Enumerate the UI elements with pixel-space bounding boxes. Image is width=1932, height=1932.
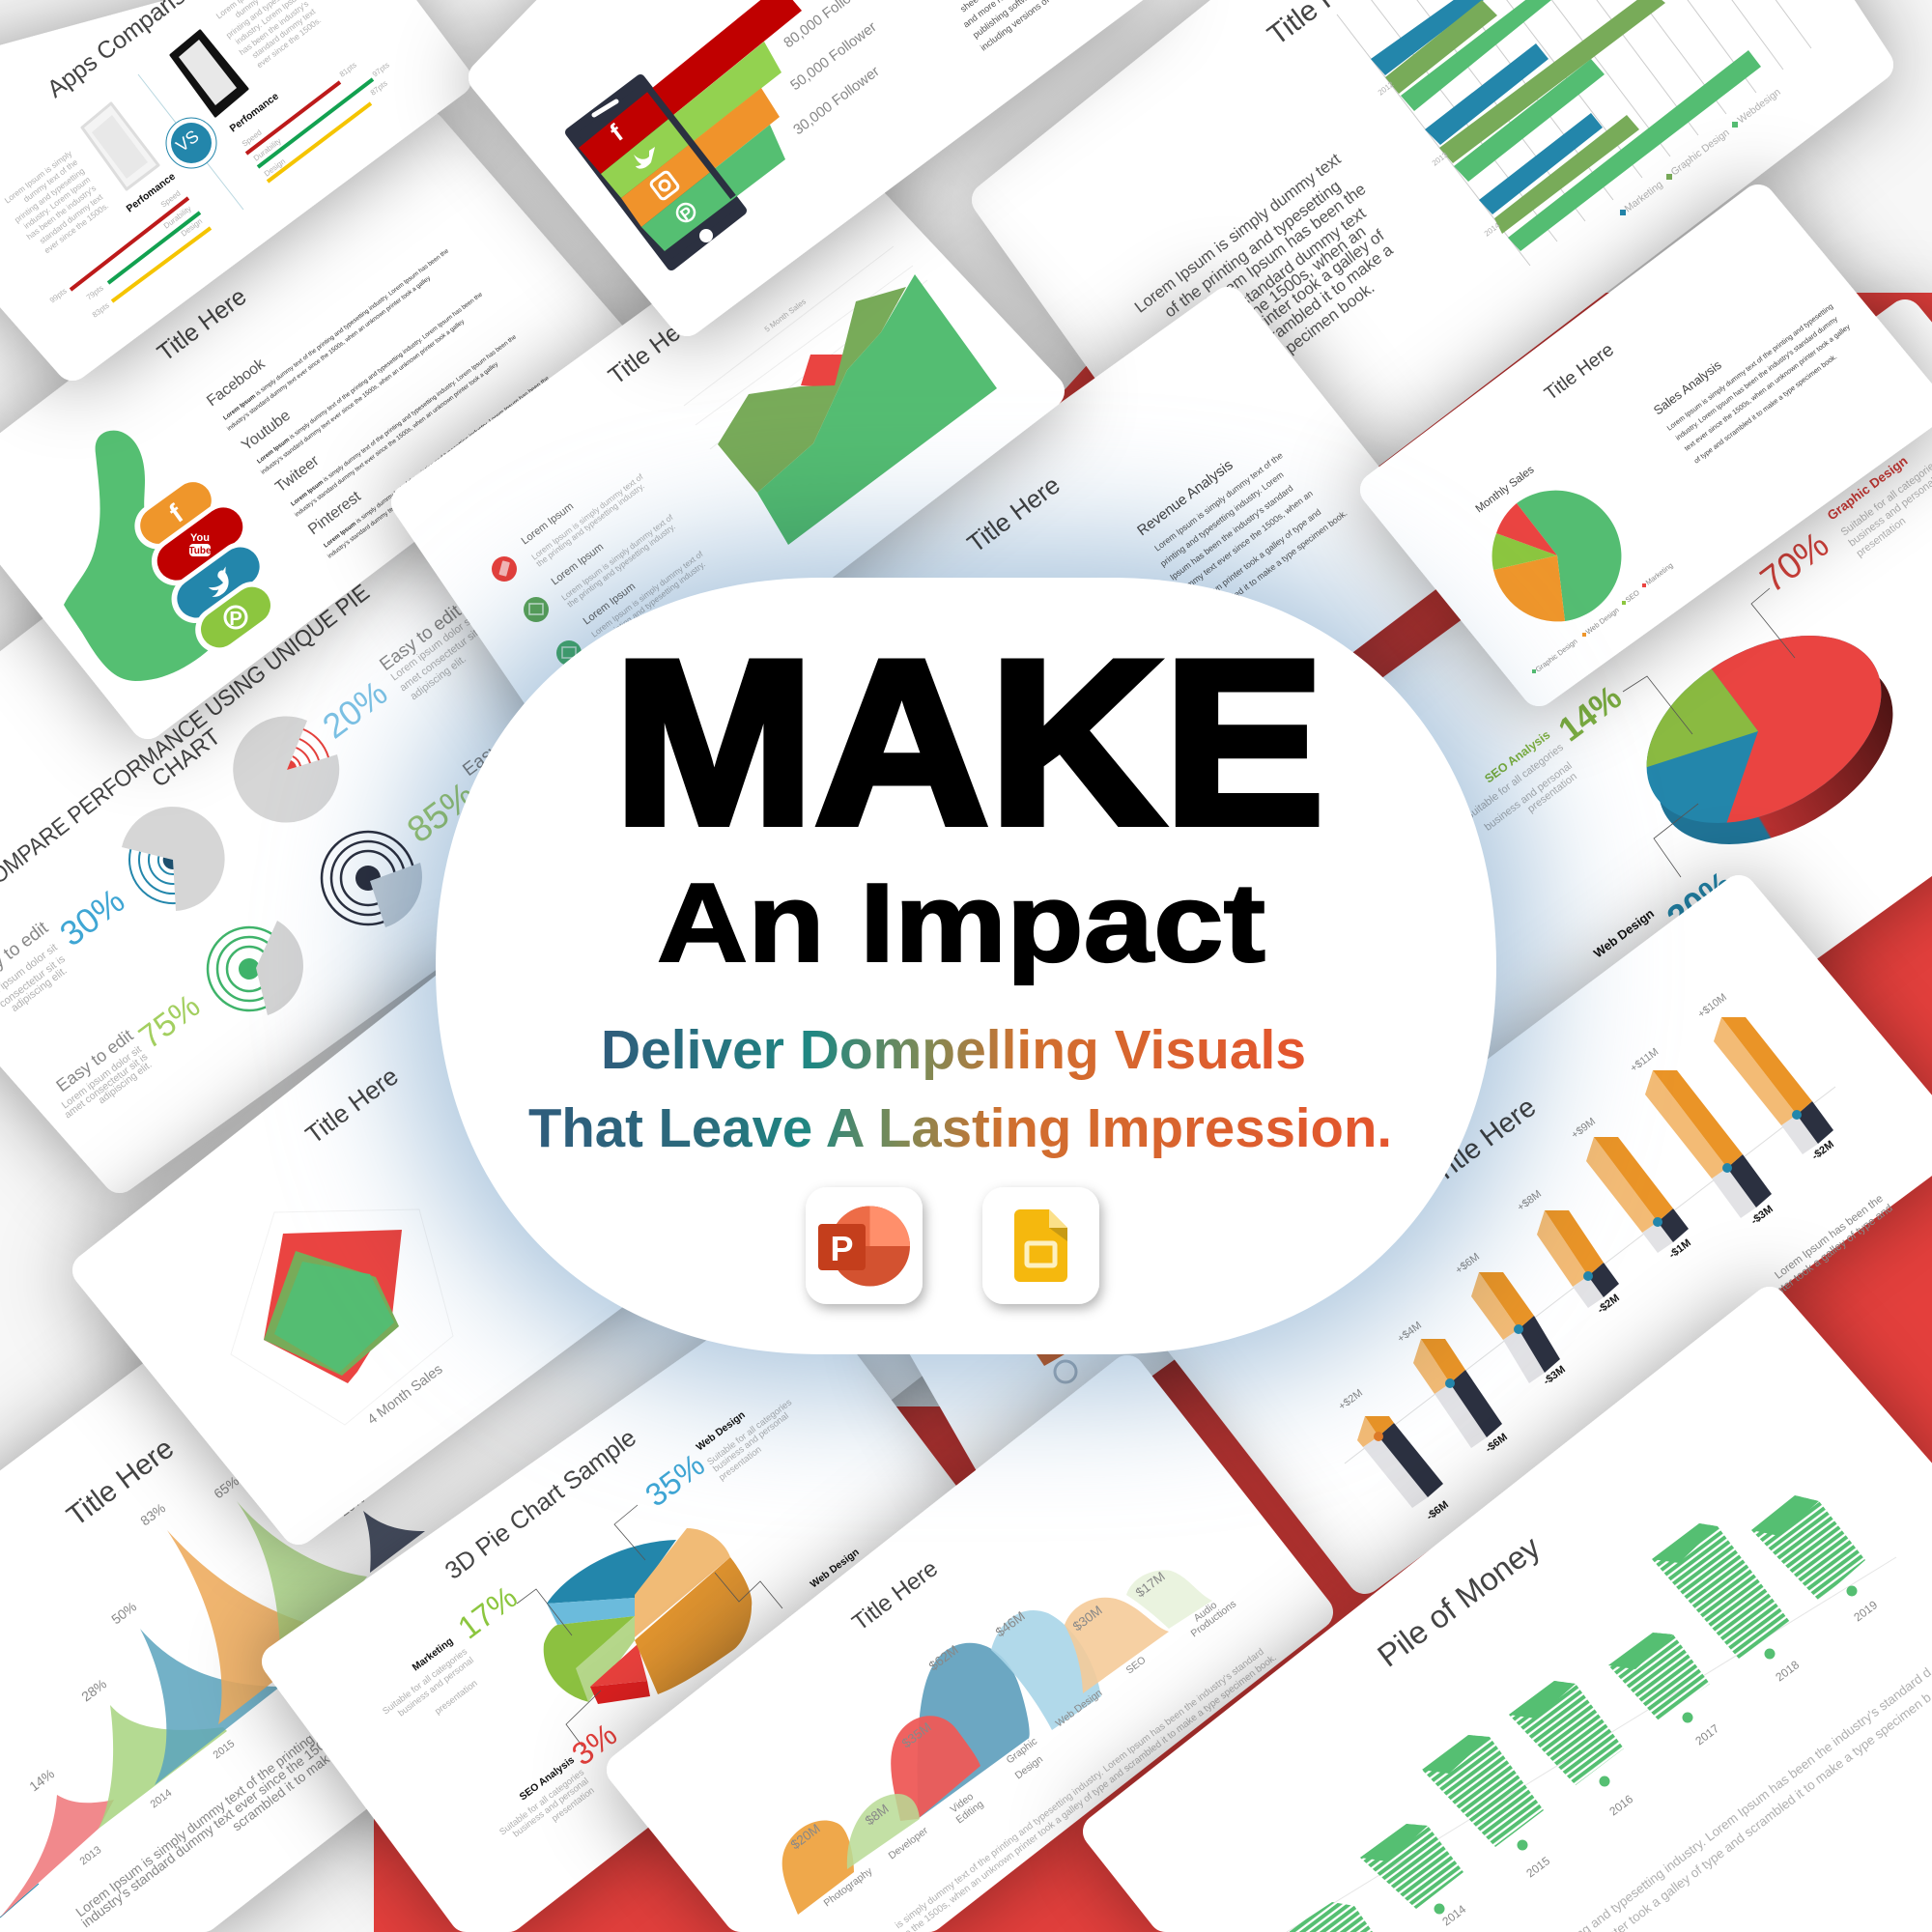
wave labels	[26, 1473, 367, 1867]
bar labels: Speed	[241, 128, 264, 149]
icon: PowerPoint: P	[830, 1229, 854, 1268]
chart legend	[1620, 86, 1783, 215]
follower labels: 50,000 Follower	[787, 18, 880, 94]
category labels: Photography	[822, 1865, 875, 1909]
wave labels: 83%	[137, 1500, 168, 1528]
list text: Lorem Ipsum	[520, 500, 576, 547]
panel: phone followers slide	[486, 0, 1140, 319]
text block: ever since the 1500s, when an	[1180, 222, 1369, 371]
text block: left: ever since the 1500s.	[43, 201, 110, 255]
category labels: Audio	[1192, 1600, 1219, 1624]
social text list: industry's standard dummy text ever since the 1500s, when an unknown printer took a galley	[260, 318, 467, 476]
wave labels: 2015	[212, 1738, 237, 1761]
pie: 75%	[52, 921, 303, 1121]
value labels: $17M	[1133, 1569, 1168, 1600]
pie: 30%: 30%	[52, 880, 131, 953]
pie: 20%: adipiscing elit.	[409, 653, 469, 702]
3D column chart	[1345, 1017, 1835, 1508]
icon: white phone	[82, 103, 158, 189]
text block: of the printing and typesetting	[1161, 177, 1344, 321]
text block: dummy text ever since the 1500s, when an	[1177, 489, 1315, 596]
category labels: Video	[949, 1791, 976, 1815]
money stacks chart	[1287, 1495, 1896, 1932]
text block: scrambled it to make a type specimen book.	[1208, 508, 1349, 618]
social text list: Lorem Ipsum is simply dummy text of the printing and typesetting industry. Lorem Ipsum has been the	[323, 375, 551, 550]
positive labels: +$10M	[1696, 991, 1729, 1020]
value labels: $30M	[1070, 1603, 1105, 1634]
callout: 17% Marketing: business and personal	[396, 1655, 476, 1719]
text block: right	[214, 0, 323, 70]
text block: type specimen book.	[1246, 278, 1378, 384]
heading: Title Here	[1541, 339, 1618, 405]
heading: 3D Pie Chart Sample	[440, 1424, 641, 1585]
year labels	[1439, 1598, 1880, 1928]
bar chart: 2014	[1483, 220, 1502, 239]
panel: radar chart slide	[90, 976, 831, 1527]
subtitle line 2: That Leave A Lasting Impression.	[528, 1097, 1392, 1159]
callout: 14% SEO Analysis: 14%	[1551, 678, 1629, 749]
panel: 3D column chart slide	[1167, 893, 1932, 1577]
heading: Title Here	[61, 1433, 180, 1533]
heading: Title Here	[153, 283, 251, 367]
panel: 3D pie slide right	[1357, 269, 1932, 1060]
wave labels: 2013	[78, 1844, 103, 1867]
negative labels: -$1M	[1667, 1237, 1693, 1261]
chart legend: Marketing	[1623, 179, 1665, 214]
heading: Title Here	[300, 1062, 404, 1150]
category labels: Productions	[1189, 1598, 1238, 1639]
bar labels: 81pts	[338, 61, 358, 79]
list text: Lorem Ipsum	[550, 541, 606, 587]
text block: is simply dummy text of the printing and typesetting industry. Lorem Ipsum has been the industry's standard	[894, 1647, 1266, 1931]
social text list: Twiteer	[272, 452, 323, 496]
icon: twitter pill	[162, 532, 274, 633]
value labels: $35M	[899, 1719, 934, 1750]
social text list: industry's standard dummy text ever since the 1500s, when an unknown printer took a galley	[294, 360, 500, 519]
divider line	[138, 74, 243, 210]
callout: 70% Graphic Design: Graphic Design	[1825, 453, 1910, 523]
icon: youtube pill: Tube	[188, 546, 212, 556]
pie legend	[1532, 561, 1675, 674]
panel: revenue analysis slide	[628, 304, 1436, 976]
text block: left	[3, 148, 110, 255]
year labels: 2015	[1523, 1854, 1552, 1880]
positive labels: +$6M	[1454, 1251, 1482, 1276]
heading: Title Here	[604, 306, 702, 390]
callout: 20% Web Design	[1591, 864, 1741, 960]
heading: Title Here	[847, 1555, 943, 1636]
text block: right: has been the industry's	[238, 0, 310, 57]
social text list	[204, 247, 551, 560]
text block: Lorem Ipsum is simply dummy text of the	[1152, 450, 1285, 554]
positive labels	[1337, 991, 1729, 1412]
callout: 14% SEO Analysis	[1463, 678, 1629, 834]
bar labels: Durability	[252, 136, 283, 163]
heading: CHART	[147, 724, 226, 793]
value labels: $20M	[788, 1821, 823, 1852]
text block: left: standard dummy text	[38, 191, 105, 245]
category labels: Web Design	[1054, 1687, 1104, 1729]
text block: industry. Lorem Ipsum has been the industry's standard dummy	[1674, 314, 1839, 442]
text block: left: has been the industry's	[25, 184, 98, 242]
social text list: Lorem Ipsum is simply dummy text of the printing and typesetting industry. Lorem Ipsum has been the	[256, 291, 484, 466]
callout: 35% Web Design: business and personal	[711, 1410, 791, 1474]
pie: 75%: adipiscing elit.	[97, 1059, 154, 1106]
callout: 3% SEO Analysis: presentation	[550, 1785, 597, 1824]
pie: 20%: Lorem ipsum dolor sit	[389, 613, 477, 683]
heading: Title Here	[1427, 1092, 1542, 1189]
list text: the printing and typesetting industry.	[565, 522, 677, 610]
callout: 20% Web Design: 20%	[1660, 864, 1741, 938]
positive labels: +$11M	[1629, 1046, 1661, 1074]
text block: Ipsum has been the industry's standard	[1168, 483, 1294, 582]
pie: 75%: Lorem ipsum dolor sit	[60, 1043, 144, 1111]
wave labels: 50%	[108, 1599, 139, 1627]
negative labels: -$2M	[1810, 1139, 1836, 1162]
text block: printer took a galley of type and	[1764, 1203, 1895, 1305]
pie chart	[1474, 464, 1621, 621]
callout: 3% SEO Analysis: Suitable for all categories	[497, 1767, 586, 1837]
icon: PowerPoint	[806, 1187, 923, 1304]
bar chart	[1337, 0, 1811, 266]
bar labels	[48, 61, 391, 320]
panel: area chart slide	[409, 182, 1047, 751]
text block: right: standard dummy text	[250, 6, 318, 60]
positive labels: +$4M	[1396, 1320, 1424, 1345]
pie: 85%: Easy	[459, 740, 504, 781]
panel: hidden slide behind wave chart	[918, 995, 1241, 1468]
icon: VS badge	[166, 118, 216, 168]
subtitle line 1: Deliver Dompelling Visuals	[601, 1019, 1306, 1081]
text block: unknown printer took a galley of	[1191, 226, 1388, 381]
year labels: 2014	[1439, 1902, 1468, 1928]
panel: 3D pie chart sample slide	[279, 1300, 980, 1915]
callout: 3% SEO Analysis: business and personal	[511, 1776, 591, 1839]
negative labels: -$2M	[1596, 1293, 1622, 1316]
callout: 35% Web Design: Suitable for all categories	[705, 1397, 794, 1467]
callout: 70% Graphic Design	[1753, 453, 1932, 601]
wave labels: 25%	[336, 1491, 367, 1519]
3D pie chart	[1623, 587, 1893, 877]
blue glow behind hero	[396, 541, 1536, 1391]
value labels: $62M	[926, 1642, 961, 1673]
pie legend: Marketing	[1644, 561, 1675, 587]
icon: thumbs up	[64, 431, 222, 681]
text block: of type and scrambled it to make a type specimen book.	[1692, 352, 1838, 466]
panel: compare performance pies slide	[0, 319, 734, 1176]
value labels: $46M	[993, 1608, 1028, 1639]
bar labels: 97pts	[371, 61, 391, 79]
bar labels: Speed	[159, 188, 183, 210]
chart legend: Webdesign	[1736, 86, 1783, 126]
social text list: Facebook	[204, 355, 269, 410]
panel: monthly sales slide	[1378, 202, 1929, 689]
year labels: 2019	[1851, 1598, 1880, 1624]
callout: 17% Marketing: presentation	[433, 1678, 480, 1717]
text block: unknown printer took a galley of type and	[1190, 507, 1322, 611]
negative labels: -$6M	[1484, 1432, 1510, 1455]
text block: left: Lorem Ipsum is simply	[3, 148, 74, 205]
category labels: SEO	[1124, 1654, 1149, 1676]
icon: facebook pill	[126, 468, 226, 558]
wave labels: 28%	[78, 1676, 109, 1704]
callout: 14% SEO Analysis: Suitable for all categories	[1463, 742, 1566, 823]
callout: 14% SEO Analysis: SEO Analysis	[1482, 728, 1552, 785]
panel: wave chart slide	[0, 956, 966, 1930]
category labels: Developer	[887, 1825, 930, 1861]
pie: 85%: 85%	[400, 775, 483, 851]
text block: right: ever since the 1500s.	[255, 15, 323, 70]
callout: 70% Graphic Design: 70%	[1753, 525, 1836, 601]
icon: facebook pill: f	[163, 498, 189, 528]
callout: 17% Marketing	[381, 1578, 524, 1719]
category labels: Graphic	[1005, 1736, 1039, 1766]
pie: 20%: amet consectetur sit is	[398, 621, 490, 694]
performance labels: Perfomance	[228, 91, 281, 134]
callout: 35% Web Design	[639, 1397, 794, 1514]
pie: 75%: Easy to edit	[52, 1026, 137, 1095]
text block	[1131, 150, 1397, 395]
pie legend: SEO	[1624, 588, 1641, 605]
icon: pinterest pill	[186, 573, 285, 662]
orange fragment	[1037, 1354, 1065, 1366]
icon: black phone	[171, 31, 247, 116]
value labels	[788, 1569, 1168, 1852]
icon: VS badge: VS	[172, 127, 203, 156]
list text: Lorem Ipsum is simply dummy text of	[529, 471, 645, 562]
text block: text ever since the 1500s, when an unknown printer took a galley	[1683, 322, 1852, 453]
negative labels	[1425, 1139, 1836, 1522]
wave labels: 65%	[211, 1473, 242, 1501]
callout: 17% Marketing: 17%	[451, 1578, 524, 1646]
pie: 20%	[233, 601, 490, 823]
bar labels: Durability	[162, 204, 193, 231]
social text list: industry's standard dummy text ever since the 1500s, when an unknown printer took a galley	[226, 274, 433, 433]
positive labels: +$9M	[1570, 1116, 1598, 1141]
text block: industry's standard dummy text ever since the 150	[78, 1737, 328, 1930]
caption: 4 Month Sales	[365, 1362, 445, 1428]
pie: 30%	[0, 807, 225, 1026]
icon: phone with follower bands	[570, 0, 802, 266]
callout: 70% Graphic Design: presentation	[1855, 515, 1908, 559]
negative labels: -$6M	[1425, 1499, 1451, 1522]
year labels: 2016	[1606, 1792, 1635, 1818]
wave labels: 2014	[149, 1787, 174, 1810]
pie: 20%: Easy to edit	[376, 601, 466, 675]
text block: industry's standard dummy text	[1178, 204, 1370, 355]
wave labels: 14%	[26, 1766, 57, 1794]
bar labels: 79pts	[85, 284, 105, 302]
icon: pinterest pill: P	[229, 609, 242, 630]
performance labels: Perfomance	[125, 171, 178, 214]
text block: left: dummy text of the	[21, 156, 79, 204]
callout: 35% Web Design: presentation	[717, 1444, 764, 1483]
wave chart	[0, 1501, 425, 1918]
callout: 3% SEO Analysis	[497, 1716, 623, 1839]
year labels: 2018	[1773, 1658, 1802, 1684]
social text list: industry's standard dummy text ever since the 1500s, when an unknown printer took a galley	[327, 402, 533, 560]
3D pie chart	[517, 1505, 782, 1747]
bar labels: 83pts	[91, 301, 111, 320]
bar labels: 99pts	[48, 287, 69, 305]
title: An Impact: An Impact	[657, 860, 1265, 985]
positive labels: +$2M	[1337, 1387, 1365, 1412]
hump chart	[782, 1570, 1212, 1915]
pie: 20%: 20%	[315, 672, 394, 746]
chart legend: Graphic Design	[1669, 127, 1732, 178]
subheading: Revenue Analysis	[1134, 457, 1236, 539]
callout: 20% Web Design: Web Design	[1591, 906, 1657, 960]
icon: Google Slides	[982, 1187, 1099, 1304]
panel: hump chart slide	[624, 1373, 1316, 1932]
pie: 75%: 75%	[132, 987, 207, 1056]
category labels: Design	[1013, 1753, 1045, 1781]
bar chart: 2013	[1431, 150, 1450, 168]
icon: youtube pill	[142, 493, 258, 595]
list text: the printing and typesetting industry.	[534, 481, 646, 569]
list icons	[492, 556, 582, 666]
callout: 14% SEO Analysis: presentation	[1525, 771, 1579, 815]
negative labels: -$3M	[1542, 1364, 1568, 1387]
list text: Lorem Ipsum	[582, 581, 638, 627]
list text: the printing and typesetting industry.	[595, 559, 707, 647]
value labels: $8M	[863, 1802, 892, 1828]
icon: phone with follower bands: f	[605, 118, 629, 147]
category labels: Editing	[954, 1798, 986, 1826]
social text list: Lorem Ipsum is simply dummy text of the printing and typesetting industry. Lorem Ipsum has been the	[222, 247, 450, 422]
callout: 3% SEO Analysis: SEO Analysis	[518, 1754, 577, 1803]
panel: social thumbs up slide	[0, 128, 628, 722]
text block: Lorem Ipsum is simply dummy text of the printing	[72, 1731, 317, 1919]
bar chart: 2012	[1377, 79, 1396, 98]
social text list: Lorem Ipsum is simply dummy text of the printing and typesetting industry. Lorem Ipsum has been the	[290, 333, 518, 508]
heading: Title Here	[962, 470, 1065, 558]
text block: left: printing and typesetting	[13, 165, 86, 225]
ring icon	[1055, 1361, 1076, 1382]
pie legend: Graphic Design	[1534, 637, 1578, 674]
label: web design hidden: Web Design	[809, 1547, 862, 1590]
bar labels: 87pts	[369, 79, 389, 98]
follower labels: 30,000 Follower	[790, 63, 883, 138]
subheading: Sales Analysis	[1651, 357, 1724, 417]
text block	[1152, 450, 1349, 618]
text block: scrambled it to mak	[229, 1750, 333, 1833]
area chart	[684, 246, 997, 545]
heading: Pile of Money	[1371, 1528, 1547, 1674]
callout: 14% SEO Analysis: business and personal	[1483, 760, 1575, 834]
callout: 17% Marketing: Marketing	[411, 1635, 455, 1673]
social text list: Pinterest	[305, 488, 364, 538]
icon: youtube pill: You	[190, 532, 210, 544]
pie chart: Monthly Sales	[1474, 464, 1537, 515]
pie legend: Web Design	[1584, 606, 1621, 637]
callout: 35% Web Design: 35%	[639, 1446, 711, 1514]
positive labels: +$8M	[1516, 1188, 1544, 1213]
comparison bars	[71, 79, 373, 301]
category labels	[822, 1598, 1238, 1909]
bar labels: Design	[263, 156, 287, 179]
red backdrop	[374, 293, 1932, 1932]
pie: 75%: amet consectetur sit is	[63, 1051, 150, 1121]
text block: type and scrambled it to make a	[1200, 241, 1397, 395]
social text list: Youtube	[239, 408, 294, 454]
radar chart	[231, 1209, 453, 1425]
pie: 85%	[322, 740, 504, 927]
text block: Lorem Ipsum is simply dummy text of the printing and typesetting	[1665, 301, 1834, 433]
callout: 3% SEO Analysis: 3%	[565, 1716, 623, 1773]
follower labels	[781, 0, 883, 138]
panel: text and bar chart slide	[989, 0, 1876, 551]
panel: pile of money slide	[1100, 1304, 1932, 1932]
icon: phone with follower bands: P	[677, 203, 696, 224]
hero panel	[436, 578, 1496, 1354]
bar labels: Design	[180, 216, 204, 239]
text block: printing and typesetting industry. Lorem	[1158, 469, 1286, 569]
text block: left: industry. Lorem Ipsum	[22, 175, 92, 231]
panel: apps comparison slide	[0, 0, 454, 363]
list text: Lorem Ipsum is simply dummy text of	[589, 549, 705, 639]
area chart: 5 Month Sales	[763, 298, 808, 334]
text block: Lorem Ipsum is simply dummy text	[1131, 150, 1345, 317]
list text	[520, 471, 707, 647]
pie: 30%: adipiscing elit.	[9, 965, 70, 1014]
text block: Lorem Ipsum has been the	[1773, 1193, 1886, 1282]
performance labels	[125, 91, 281, 214]
title: MAKE: MAKE	[613, 612, 1324, 873]
callout: 35% Web Design: Web Design	[695, 1409, 748, 1453]
list text: Lorem Ipsum is simply dummy text of	[559, 512, 675, 603]
negative labels: -$3M	[1749, 1204, 1776, 1227]
callout: 17% Marketing: Suitable for all categories	[381, 1646, 469, 1717]
text block: Lorem Ipsum has been the	[1202, 180, 1369, 312]
year labels: 2017	[1692, 1721, 1721, 1747]
